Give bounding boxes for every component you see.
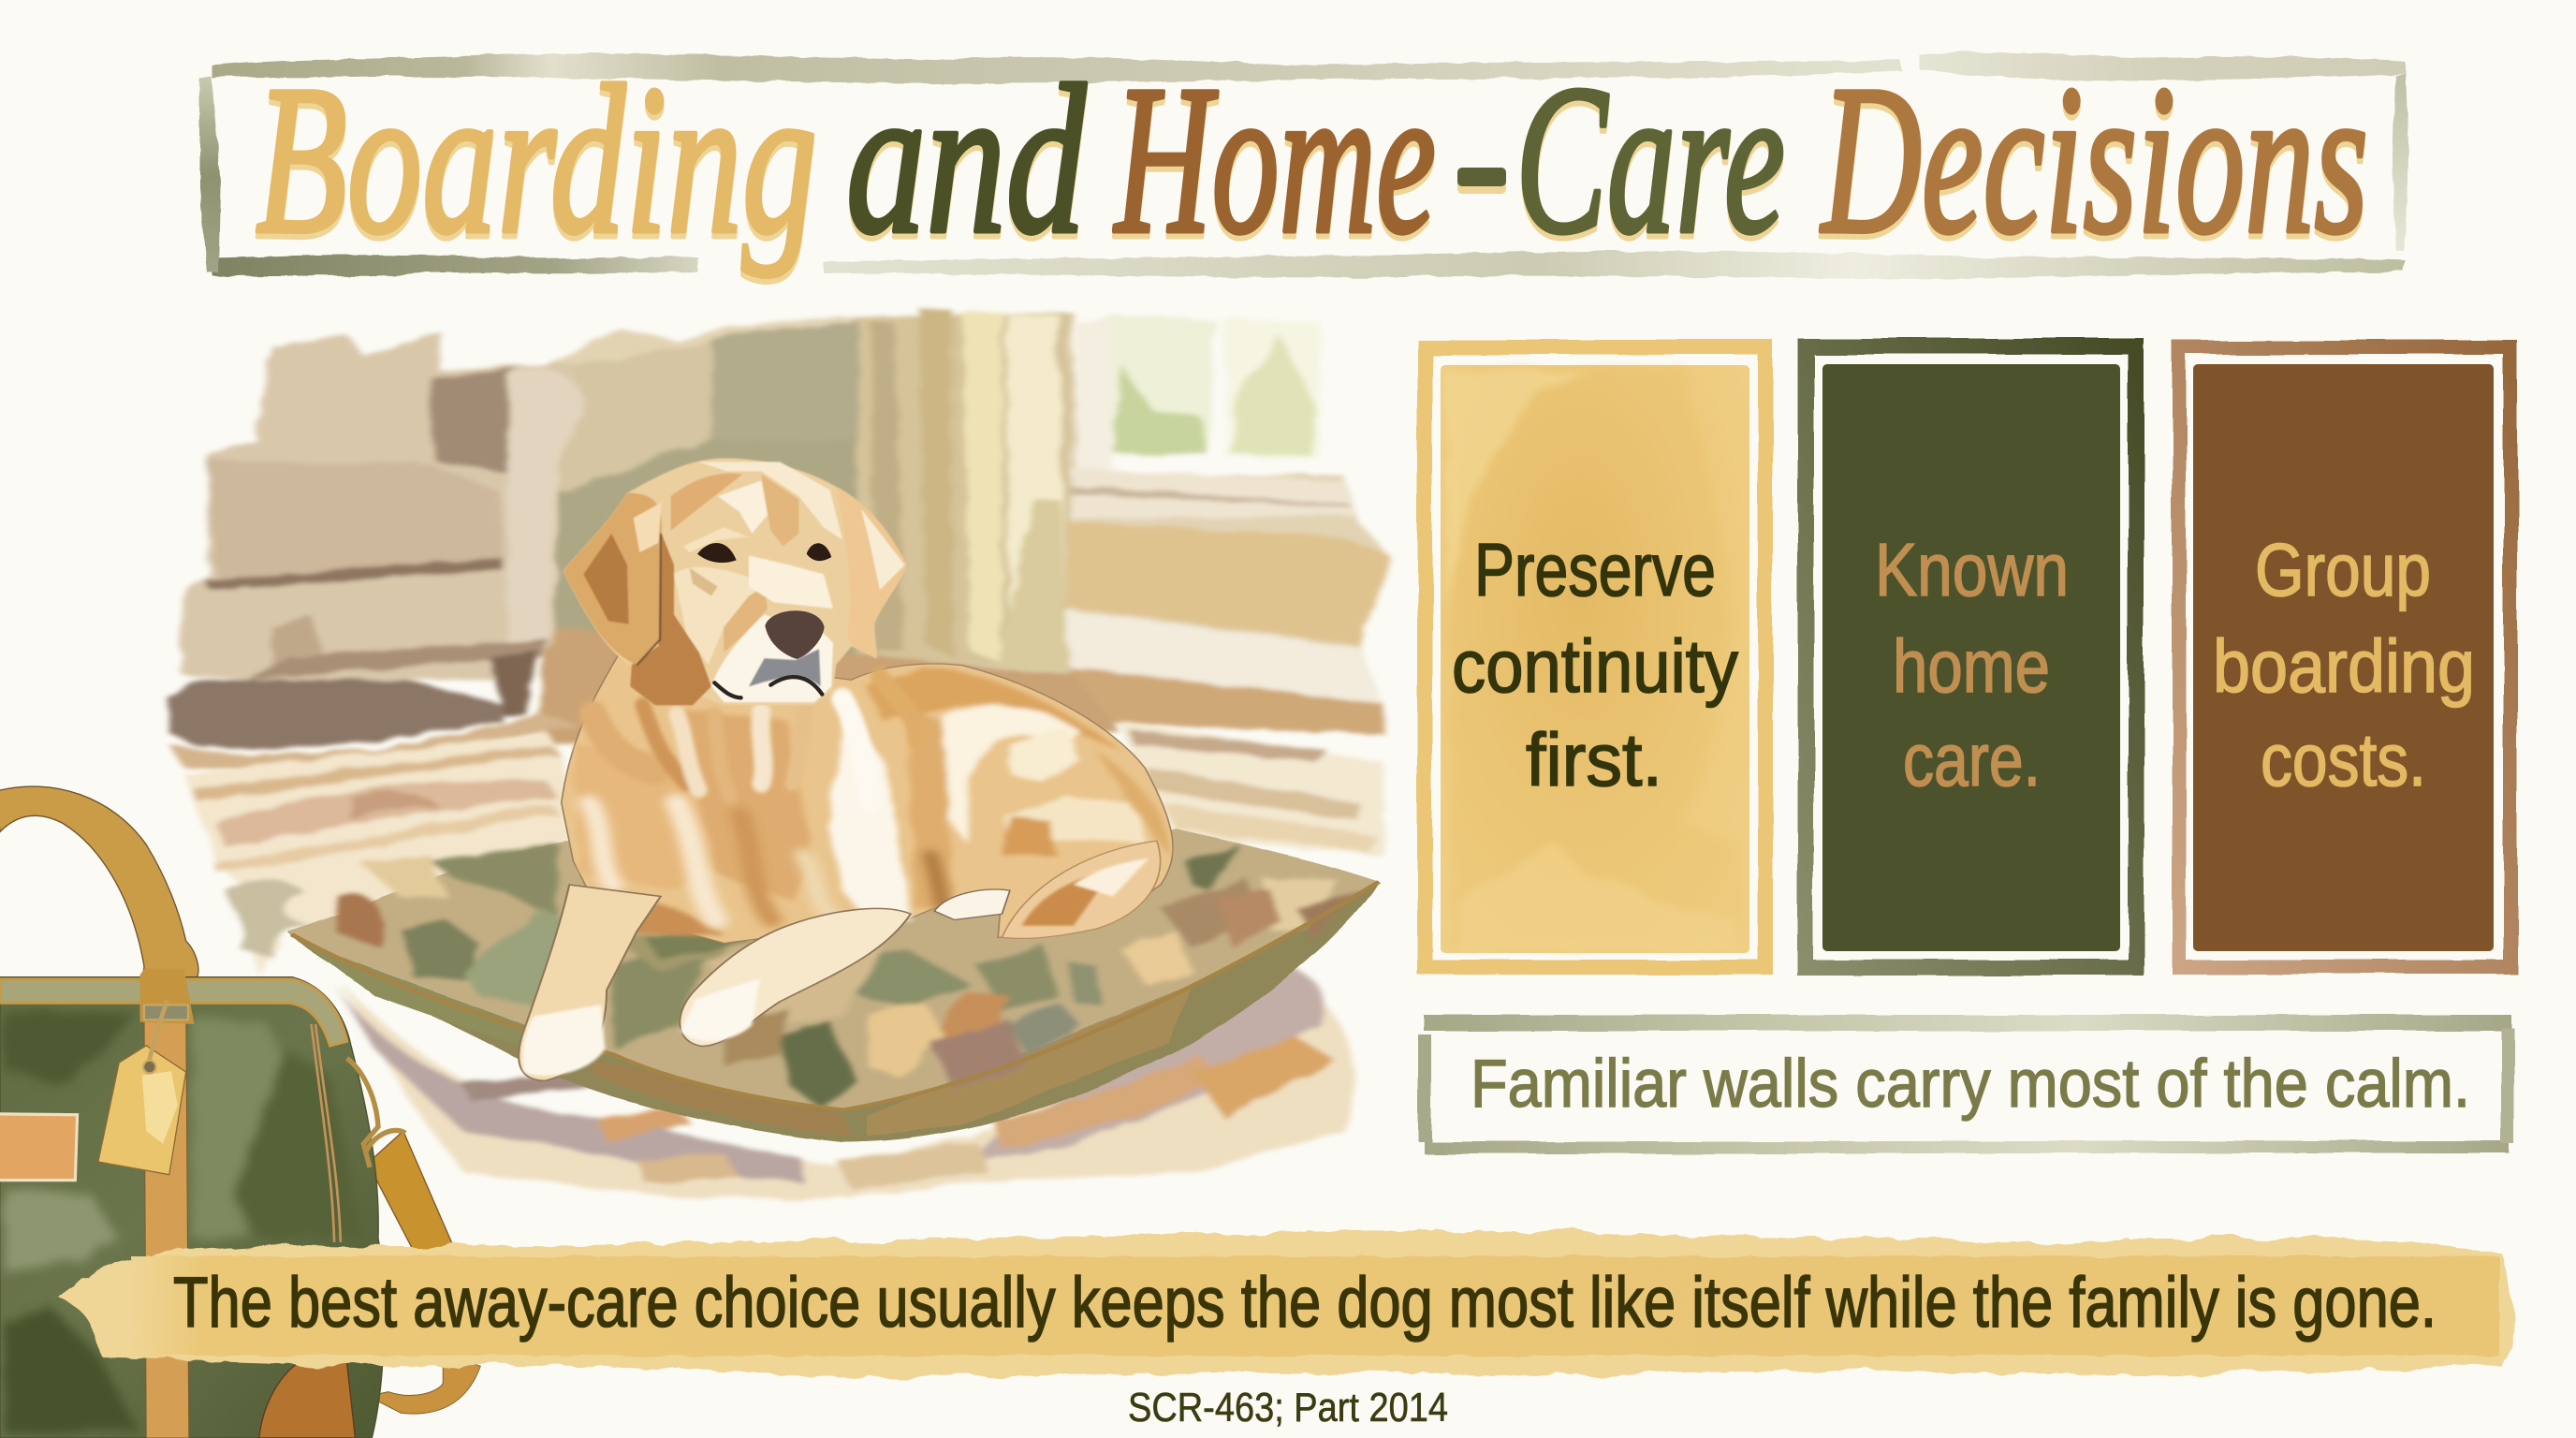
illustration: golden retriever on cushion in living room: [168, 308, 1391, 1200]
lower pocket: [259, 1357, 355, 1438]
card 3 text: [2213, 528, 2475, 801]
hind paw: [934, 889, 1010, 919]
scene below the dog head: [168, 308, 1391, 1200]
right eye: [807, 543, 831, 561]
title: Boarding and Home-Care Decisions: Boarding: [256, 48, 817, 284]
card 2 text: care.: [1903, 718, 2041, 801]
title: Boarding and Home-Care Decisions: Boarding: [256, 42, 817, 278]
card 1 text: first.: [1526, 718, 1662, 801]
name plate: [0, 1114, 78, 1181]
card 2: Known home care: [1806, 346, 2136, 968]
buckle band: [140, 969, 195, 1024]
card 3: Group boarding costs: [2179, 347, 2510, 967]
card 2 text: Known: [1875, 528, 2069, 611]
zipper seam: [312, 1024, 341, 1242]
bag watercolor washes: [4, 1011, 363, 1434]
card 3 text: boarding: [2213, 624, 2475, 708]
fluffy tail: [1002, 841, 1161, 938]
travel bag: [0, 786, 480, 1438]
dog body silhouette: [562, 651, 1173, 944]
card 1 text: Preserve: [1474, 528, 1716, 611]
patterned rug: [184, 721, 1383, 1200]
handle: [0, 786, 198, 1001]
floor cushion: [287, 829, 1379, 1142]
title: Boarding and Home-Care Decisions: Home: [1113, 48, 1436, 284]
cushion camouflage pattern: [335, 844, 1359, 1107]
golden retriever body: [519, 651, 1173, 1080]
cushion piping: [291, 882, 1379, 1110]
band brush background: [58, 1230, 2514, 1377]
card 3 panel: [2193, 364, 2494, 951]
chest ruff fur: [593, 677, 917, 802]
card 2 border: [1806, 346, 2136, 968]
card 3 border: [2179, 347, 2510, 967]
title: Boarding and Home-Care Decisions: Care: [1515, 42, 1785, 278]
shoulder strap: [368, 1131, 453, 1259]
title: Boarding and Home-Care Decisions: [256, 42, 2368, 284]
card 2 panel: [1822, 364, 2120, 951]
card 1 text: continuity: [1452, 624, 1738, 708]
vertical strap: [144, 1007, 189, 1438]
mouth: [714, 677, 822, 697]
card 2 text: home: [1893, 624, 2050, 708]
nose: [765, 610, 825, 659]
title: Boarding and Home-Care Decisions: Home: [1113, 42, 1436, 278]
title: Boarding and Home-Care Decisions: Care: [1515, 48, 1785, 284]
right foreleg: [680, 908, 911, 1047]
muzzle shadow: [749, 649, 821, 686]
source citation: SCR-463; Part 2014: [1128, 1385, 1448, 1431]
head markings: [630, 462, 842, 705]
left foreleg: [519, 885, 661, 1080]
right ear: [836, 487, 906, 658]
title: Boarding and Home-Care Decisions: and: [846, 42, 1087, 278]
card 1 text: [1452, 528, 1738, 801]
card 3 text: costs.: [2261, 718, 2426, 801]
right paw highlight: [681, 978, 760, 1041]
room background wash: [542, 308, 1391, 744]
card 3 text: Group: [2255, 528, 2431, 611]
left paw highlight: [522, 1005, 605, 1076]
bag top band: [0, 979, 347, 1046]
rear strap loop: [368, 1354, 480, 1414]
title frame brush strokes: [199, 52, 2409, 279]
strap hardware ring: [347, 1058, 405, 1167]
title: Boarding and Home-Care Decisions: and: [846, 48, 1087, 284]
callout: familiar walls: [1418, 1015, 2514, 1153]
sofa armchair: [168, 331, 588, 773]
cushion body: [287, 829, 1379, 1142]
left ear: [564, 493, 662, 666]
callout frame: [1418, 1015, 2514, 1153]
luggage tag: [98, 1001, 186, 1175]
title banner: [199, 42, 2409, 284]
strap ring: [144, 1005, 188, 1020]
card 1 border: [1425, 347, 1765, 967]
soft fur streaks: [589, 803, 943, 919]
card 1: Preserve continuity first: [1425, 347, 1765, 967]
band core wash: [131, 1256, 2499, 1356]
coat washes: [573, 667, 1170, 934]
takeaway band: [58, 1230, 2514, 1377]
head shape: [564, 458, 906, 705]
chest ruff and dog head: [564, 458, 917, 802]
card 1 panel: [1441, 365, 1749, 953]
left eye: [697, 543, 737, 563]
bag body: [0, 977, 384, 1438]
callout text: Familiar walls carry most of the calm.: [1471, 1047, 2470, 1122]
card 2 text: [1875, 528, 2069, 801]
